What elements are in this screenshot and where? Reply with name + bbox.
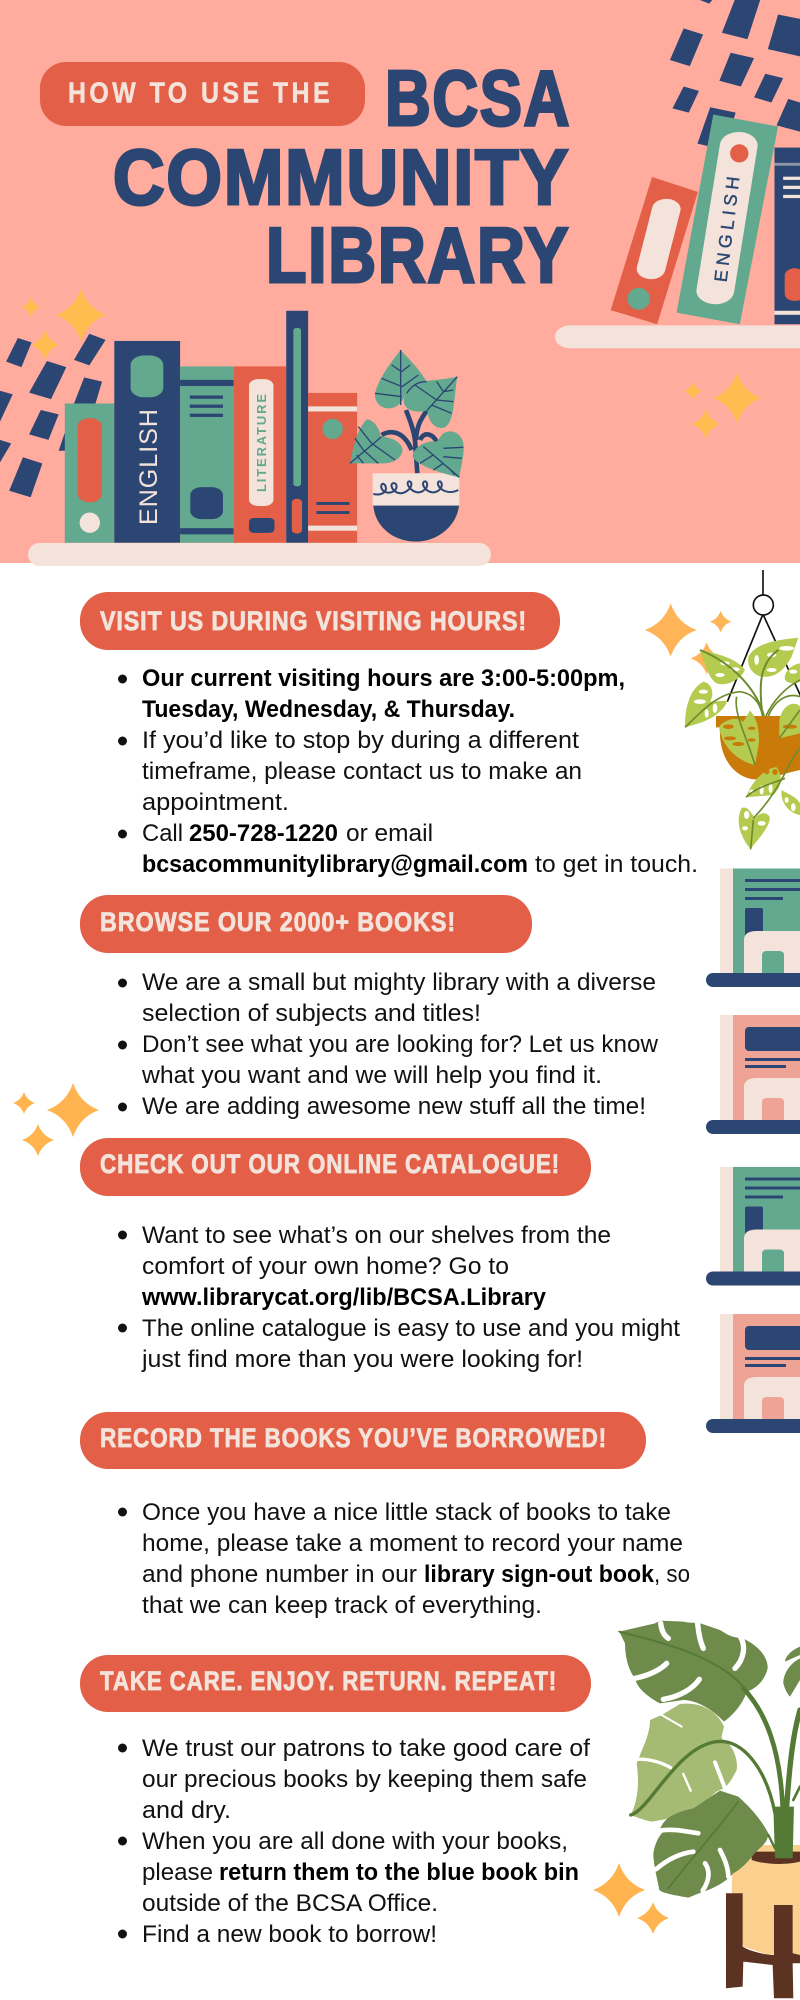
title: LIBRARY [266,211,570,299]
text block: catalogue list: just find more than you were looking for! [141,1346,583,1373]
text block: record list: that we can keep track of everything. [142,1592,542,1619]
illustration: monstera plant in pot [619,1621,800,1998]
text block: take care list: return them to the blue book bin [219,1859,579,1886]
text block: take care list: and dry. [142,1797,231,1824]
text block: visiting hours list: bcsacommunitylibrary@gmail.com [142,851,528,878]
title: BCSA [385,54,571,142]
text block: browse list [118,969,659,1120]
illustration: hanging plant [645,570,800,849]
heading pill: record: RECORD THE BOOKS YOU’VE BORROWED! [100,1423,607,1453]
title: COMMUNITY [113,133,570,221]
text block: visiting hours list: If you’d like to stop by during a different [142,727,579,754]
text block: visiting hours list: to get in touch. [535,851,698,878]
text block: take care list: outside of the BCSA Office. [142,1890,438,1917]
heading pill: record [80,1412,646,1469]
illustration: row of books on shelf: ENGLISH [135,409,163,525]
text block: take care list: We trust our patrons to take good care of [142,1735,590,1762]
text block: catalogue list: comfort of your own home? Go to [142,1253,509,1280]
heading pill: how to use the: HOW TO USE THE [68,78,333,110]
text block: visiting hours list [118,665,698,878]
heading pill: visit us [80,592,560,650]
text block: record list: , so [654,1561,690,1588]
section: take care [80,1655,591,1948]
text block: record list: Once you have a nice little stack of books to take [142,1499,671,1526]
heading pill: browse [80,895,532,953]
section: record books [80,1412,690,1619]
text block: browse list: Don’t see what you are looking for? Let us know [142,1031,659,1058]
text block: visiting hours list: timeframe, please contact us to make an [142,758,582,785]
text block: take care list: Find a new book to borrow! [142,1921,437,1948]
illustration: bookshelf panel green 2 [706,1167,800,1286]
text block: catalogue list: The online catalogue is easy to use and you might [142,1315,680,1342]
heading pill: visit us: VISIT US DURING VISITING HOURS! [100,606,527,636]
text block: browse list: selection of subjects and titles! [142,1000,481,1027]
illustration: right shelf with books: ENGLISH [711,175,743,283]
section: online catalogue [80,1138,680,1373]
title [40,54,571,299]
icon: sparkles by monstera [593,1863,669,1934]
decoration: navy dashes top right [670,0,800,150]
text block: take care list: our precious books by keeping them safe [142,1766,587,1793]
text block: catalogue list: www.librarycat.org/lib/BCSA.Library [141,1284,547,1311]
icon: sparkles left of section 3 [13,1083,99,1156]
text block: browse list: We are a small but mighty library with a diverse [142,969,656,996]
illustration: right shelf with books [555,115,800,348]
text block: visiting hours list: appointment. [142,789,289,816]
text block: record list [118,1499,690,1619]
text block: catalogue list [118,1222,680,1373]
text block: visiting hours list: Tuesday, Wednesday, & Thursday. [142,696,515,723]
illustration: bookshelf panel pink 1 [706,1015,800,1134]
heading pill: how to use the [40,62,365,126]
text block: visiting hours list: 250-728-1220 [189,820,338,847]
panel: header background [0,0,800,563]
text block: record list: library sign-out book [424,1561,655,1588]
section: browse books [80,895,659,1120]
text block: take care list [118,1735,590,1948]
text block: catalogue list: Want to see what’s on our shelves from the [142,1222,611,1249]
illustration: left shelf [28,543,491,566]
decoration: navy dashes left [0,334,106,497]
illustration: potted plant [350,350,464,542]
heading pill: take care [80,1655,591,1712]
text block: record list: home, please take a moment to record your name [142,1530,683,1557]
heading pill: take care: TAKE CARE. ENJOY. RETURN. REPEAT! [100,1666,557,1696]
heading pill: browse: BROWSE OUR 2000+ BOOKS! [100,907,456,937]
text block: take care list: When you are all done with your books, [142,1828,568,1855]
illustration: bookshelf panel green 1 [706,868,800,987]
section: visiting hours [80,592,698,878]
text block: visiting hours list: or email [346,820,433,847]
heading pill: catalogue [80,1138,591,1196]
text block: record list: and phone number in our [142,1561,417,1588]
text block: visiting hours list: Our current visiting hours are 3:00-5:00pm, [142,665,625,692]
text block: visiting hours list: Call [142,820,183,847]
text block: take care list: please [142,1859,213,1886]
icon: sparkles top left [22,289,106,360]
text block: browse list: what you want and we will help you find it. [141,1062,602,1089]
illustration: row of books on shelf: LITERATURE [254,394,269,492]
heading pill: catalogue: CHECK OUT OUR ONLINE CATALOGUE! [100,1149,560,1179]
icon: sparkles right of header [684,373,761,439]
illustration: bookshelf panel pink 2 [706,1314,800,1433]
illustration: row of books on shelf [65,311,357,543]
text block: browse list: We are adding awesome new stuff all the time! [142,1093,646,1120]
